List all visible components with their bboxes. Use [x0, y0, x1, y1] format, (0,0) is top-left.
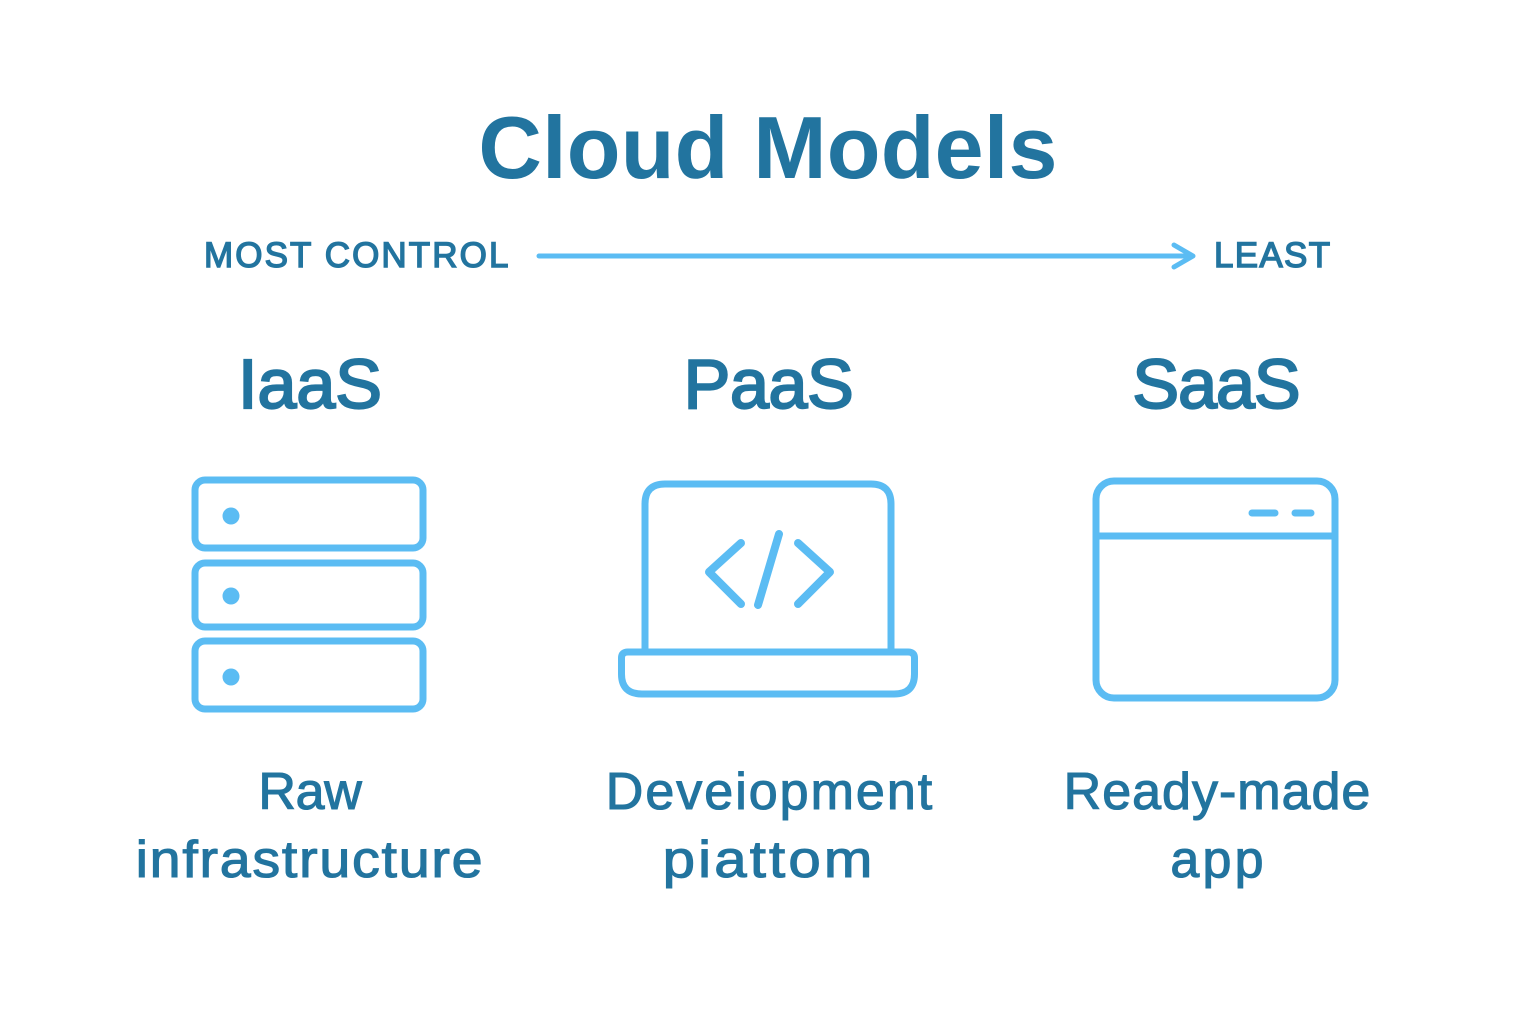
- text: ready-made app: app: [1170, 831, 1267, 889]
- title: Cloud Models: [478, 98, 1058, 197]
- text: raw infrastructure: Raw: [258, 763, 362, 821]
- text: raw infrastructure: [136, 763, 484, 889]
- text: ready-made app: [1064, 763, 1371, 889]
- heading: PaaS: PaaS: [684, 345, 853, 423]
- icon: laptop with code: [618, 480, 918, 698]
- text: development platform: [606, 763, 934, 889]
- heading: SaaS: SaaS: [1132, 345, 1300, 423]
- text: ready-made app: Ready-made: [1064, 763, 1371, 821]
- text: development platform: Deveiopment: [606, 763, 934, 821]
- label: least: LEAST: [1214, 236, 1331, 275]
- label: most control: MOST CONTROL: [204, 236, 511, 275]
- icon: application window: [1092, 478, 1338, 702]
- heading: IaaS: IaaS: [238, 345, 382, 423]
- arrow: control scale: [536, 242, 1196, 270]
- icon: server stack: [192, 476, 426, 712]
- text: development platform: piattom: [663, 831, 875, 889]
- text: raw infrastructure: infrastructure: [136, 831, 484, 889]
